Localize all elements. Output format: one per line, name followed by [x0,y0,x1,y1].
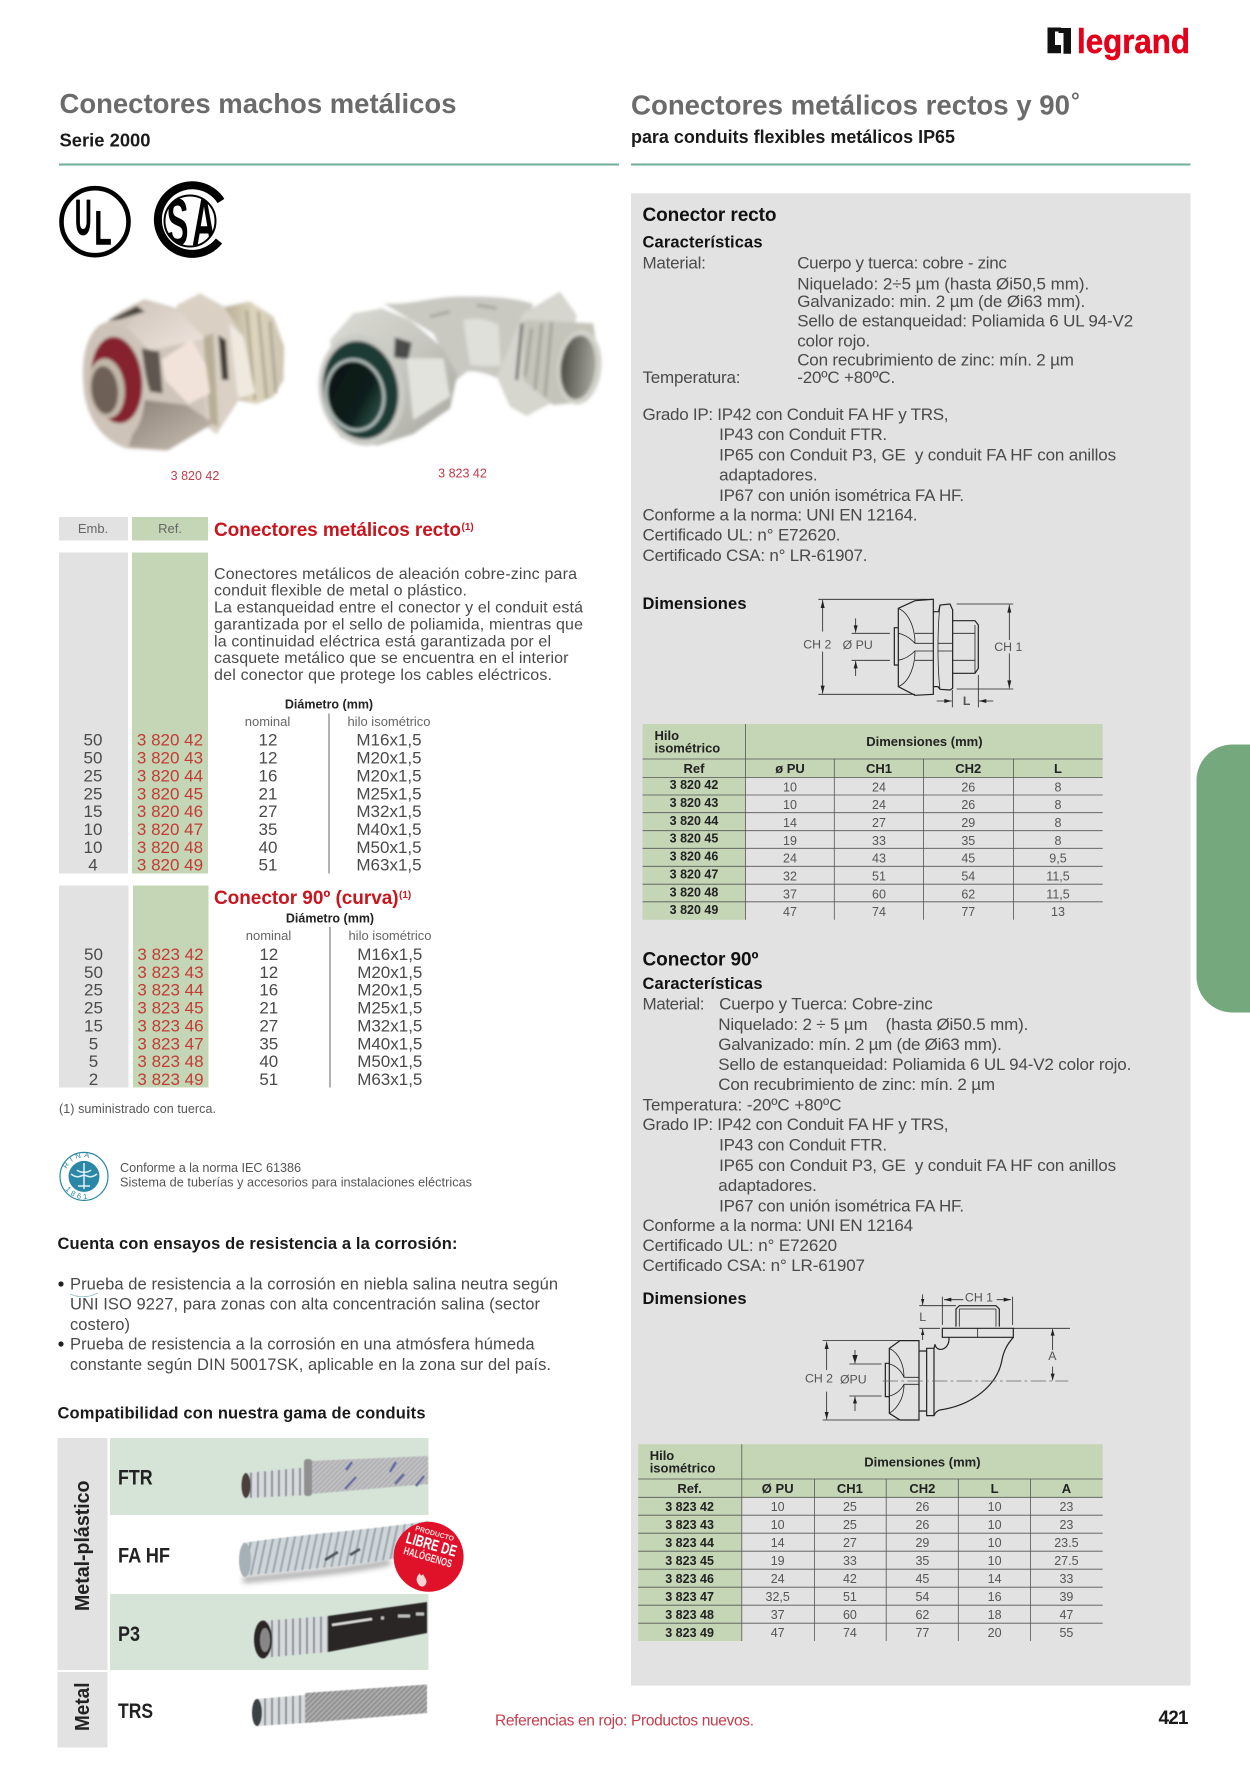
diagram: 90 degree connector dimensions: CH 1 [965,1291,993,1305]
table: 90 degree connector references: 3 823 43 [137,963,204,982]
text block: straight connector characteristics: Grado IP: IP42 con Conduit FA HF y TRS, [642,405,948,424]
text block: straight connector characteristics: Temperatura: [642,368,740,387]
table: 90 degree connector dimensions: 77 [915,1626,929,1640]
table: straight connector dimensions: 8 [1055,780,1062,794]
diagram: 90 degree connector dimensions: L [919,1310,926,1324]
table: 90 degree connector references: 3 823 44 [137,981,204,1000]
icon: RINA seal: RINA [63,1153,89,1168]
table: straight connector dimensions: 60 [872,887,886,901]
table: straight connector references: 3 820 48 [137,838,203,857]
table: 90 degree connector references [59,886,432,1089]
label: photo references: 3 823 42 [438,466,487,480]
table: straight connector dimensions: 24 [872,798,886,812]
text block: straight connector characteristics: Galvanizado: min. 2 µm (de Øi63 mm). [797,292,1085,311]
table: straight connector references: 50 [84,748,102,768]
text block: 90 degree connector characteristics: IP65 con Conduit P3, GE y conduit FA HF con anillos [719,1156,1116,1175]
diagram: straight connector dimensions: CH 1 [994,640,1022,654]
side tab [1196,744,1250,1012]
text block: 90 degree connector characteristics: Material: [642,995,704,1014]
table: straight connector references: 3 820 42 [137,731,203,750]
table: 90 degree connector dimensions: 3 823 42 [665,1500,714,1514]
table: 90 degree connector dimensions: 32,5 [766,1590,790,1604]
table: 90 degree connector dimensions: 45 [915,1572,929,1586]
text block: straight connector characteristics: color rojo. [797,332,870,351]
table: straight connector references: 3 820 46 [137,802,203,821]
table: 90 degree connector dimensions: CH1 [837,1481,863,1496]
diagram: 90 degree connector dimensions [805,1291,1070,1420]
table: straight connector references: 12 [259,748,277,768]
table: straight connector references: 4 [88,856,98,875]
table: 90 degree connector references: M63x1,5 [357,1070,422,1089]
table header: Emb. and Ref. [59,517,208,540]
table: straight connector references: 15 [84,802,102,821]
table: straight connector references: 25 [84,766,102,785]
table: 90 degree connector references: 2 [89,1070,98,1089]
heading: Conector 90: Conector 90º [642,950,759,970]
table: straight connector dimensions: 19 [783,834,797,848]
table: straight connector dimensions: 51 [872,870,886,884]
text block: 90 degree connector characteristics: Cuerpo y Tuerca: Cobre-zinc [719,995,933,1014]
table: 90 degree connector dimensions: 47 [1059,1608,1073,1622]
table: straight connector references: 40 [259,838,277,857]
table: 90 degree connector dimensions: A [1062,1481,1072,1496]
table: 90 degree connector references: 3 823 42 [137,945,204,964]
diagram: straight connector dimensions: L [963,694,971,708]
table: straight connector dimensions: 10 [783,780,797,794]
table: 90 degree connector references: M20x1,5 [357,963,422,982]
heading: left title [60,88,456,150]
table: straight connector dimensions: 35 [961,834,975,848]
table: 90 degree connector dimensions: 18 [988,1608,1002,1622]
photo: 90 degree connector [310,292,605,453]
note: red references: Referencias en rojo: Productos nuevos. [495,1712,754,1730]
table: 90 degree connector references: 25 [84,981,103,1000]
text block: 90 degree connector characteristics [642,975,1131,1275]
table: straight connector dimensions: 27 [872,816,886,830]
table: straight connector dimensions: Hilo [654,728,679,743]
table: 90 degree connector dimensions: 10 [771,1500,785,1514]
text block: 90 degree connector characteristics: Certificado UL: n° E72620 [642,1236,837,1255]
table: 90 degree connector references: 27 [259,1016,278,1035]
panel: conduit compatibility table: FTR [118,1466,153,1489]
table: 90 degree connector references: 50 [84,945,103,964]
text block: IEC conformity: Sistema de tuberías y accesorios para instalaciones eléctricas [120,1176,472,1190]
heading: right title [631,88,1080,147]
table: 90 degree connector references: 21 [259,999,278,1018]
table: straight connector dimensions: 43 [872,852,886,866]
table: straight connector dimensions: 33 [872,834,886,848]
icon: RINA seal [59,1152,109,1201]
table: straight connector dimensions: CH1 [866,761,892,776]
table: straight connector dimensions: 11,5 [1046,887,1070,901]
table: straight connector references: Diámetro (mm) [285,698,373,712]
heading: conduit compatibility: Compatibilidad con nuestra gama de conduits [58,1404,426,1422]
table: straight connector references: 3 820 44 [137,766,203,785]
table: 90 degree connector references: 3 823 47 [137,1034,204,1053]
table: straight connector references: 51 [259,856,277,875]
text block: straight connector characteristics: adaptadores. [719,466,818,484]
table: 90 degree connector dimensions: 3 823 45 [665,1554,714,1568]
text block: 90 degree connector characteristics: Conforme a la norma: UNI EN 12164 [642,1216,913,1235]
heading: Dimensiones 90: Dimensiones [642,1290,746,1308]
text block: straight connector characteristics: Certificado CSA: n° LR-61907. [642,546,868,565]
table: straight connector references [59,552,431,875]
table: 90 degree connector dimensions: 25 [843,1518,857,1532]
table: 90 degree connector dimensions: 23 [1059,1500,1073,1514]
text block: straight connector characteristics: -20ºC +80ºC. [797,368,895,387]
image: P3 conduit [254,1602,427,1658]
table: straight connector references: 10 [84,820,102,839]
table: straight connector dimensions: 47 [783,905,797,919]
image: TRS conduit [252,1684,427,1726]
table: straight connector dimensions: 74 [872,905,886,919]
text block: straight connector characteristics: Material: [642,254,706,272]
table: 90 degree connector dimensions: 14 [988,1572,1002,1586]
table: 90 degree connector dimensions: Dimensiones (mm) [864,1454,981,1470]
table: 90 degree connector references: 3 823 48 [137,1052,204,1071]
table: straight connector references: hilo isométrico [347,714,431,729]
diagram: straight connector dimensions: Ø PU [843,638,873,652]
table: 90 degree connector references: 15 [84,1016,103,1035]
table: 90 degree connector dimensions: 42 [843,1572,857,1586]
image: FA HF conduit [239,1521,428,1580]
heading: Conectores metálicos recto: Conectores metálicos recto [214,520,461,541]
table: 90 degree connector dimensions: 29 [915,1536,929,1550]
text block: 90 degree connector characteristics: IP67 con unión isométrica FA HF. [719,1196,964,1215]
text block: IEC conformity [120,1161,472,1190]
table: 90 degree connector dimensions: 3 823 47 [665,1590,714,1604]
table: straight connector dimensions: isométrico [654,740,720,756]
text block: product description: garantizada por el sello de poliamida, mientras que [214,616,583,634]
table: 90 degree connector dimensions: 10 [988,1500,1002,1514]
diagram: 90 degree connector dimensions: A [1048,1349,1057,1363]
table: 90 degree connector dimensions: 23 [1059,1518,1073,1532]
diagram: 90 degree connector dimensions: ØPU [840,1372,867,1386]
table: straight connector references: 50 [84,731,102,750]
table: 90 degree connector references: hilo isométrico [348,928,432,943]
table: straight connector dimensions: 26 [961,780,975,794]
table: 90 degree connector dimensions: 60 [843,1608,857,1622]
table: 90 degree connector dimensions: Ø PU [762,1481,794,1496]
table: 90 degree connector dimensions [638,1444,1103,1641]
table: straight connector references: 3 820 43 [137,748,203,768]
table: 90 degree connector dimensions: 51 [843,1590,857,1604]
diagram: 90 degree connector dimensions: CH 2 [805,1371,833,1385]
table: straight connector dimensions: 3 820 48 [670,885,718,899]
table: straight connector dimensions: 45 [961,852,975,866]
text block: straight connector characteristics: IP67 con unión isométrica FA HF. [719,486,964,505]
table: straight connector references: M16x1,5 [356,731,422,750]
heading: left title: Conectores machos metálicos [60,88,456,119]
table: straight connector dimensions: 8 [1055,834,1062,848]
table: 90 degree connector references: 5 [89,1034,98,1053]
table: straight connector dimensions: 8 [1055,798,1062,812]
table: 90 degree connector dimensions: 10 [988,1554,1002,1568]
heading: Conectores metálicos recto: (1) [462,522,474,533]
photo: straight connector [77,293,284,451]
text block: straight connector characteristics [642,234,1133,565]
icon: UL certification mark: U [75,190,92,246]
badge: halogen free [394,1522,464,1592]
table: straight connector dimensions: 11,5 [1046,870,1070,884]
table: straight connector references: M40x1,5 [356,820,422,839]
table: 90 degree connector dimensions: L [991,1481,999,1496]
icon: UL certification mark [62,188,128,256]
table: 90 degree connector dimensions: 39 [1059,1590,1073,1604]
text block: 90 degree connector characteristics: Galvanizado: mín. 2 µm (de Øi63 mm). [718,1035,1002,1054]
text block: IEC conformity: Conforme a la norma IEC 61386 [120,1161,301,1175]
table: straight connector dimensions: 37 [783,887,797,901]
table: 90 degree connector references: 12 [259,963,278,982]
table: 90 degree connector dimensions: 33 [843,1554,857,1568]
table: 90 degree connector dimensions: 20 [988,1626,1002,1640]
table: 90 degree connector dimensions: 10 [988,1518,1002,1532]
table: straight connector dimensions: 3 820 45 [670,832,718,846]
table: 90 degree connector references: 51 [259,1070,278,1089]
table header: Emb. and Ref.: Ref. [158,521,182,536]
table: 90 degree connector dimensions: 3 823 44 [665,1536,714,1550]
table: straight connector references: M20x1,5 [356,766,422,785]
heading: Conector recto: Conector recto [642,205,776,226]
table: straight connector dimensions [642,724,1103,920]
table: straight connector references: 16 [259,766,277,785]
table: straight connector dimensions: 3 820 46 [670,850,718,864]
table: 90 degree connector references: 5 [89,1052,98,1071]
table header: Emb. and Ref.: Emb. [78,521,108,536]
table: 90 degree connector dimensions: 55 [1059,1626,1073,1640]
table: 90 degree connector dimensions: 24 [771,1572,785,1586]
heading: right title: Conectores metálicos rectos y 90 [631,90,1070,120]
table: straight connector dimensions: 14 [783,816,797,830]
table: 90 degree connector dimensions: 14 [771,1536,785,1550]
text block: corrosion tests: Prueba de resistencia a la corrosión en una atmósfera húmeda [70,1336,535,1354]
text block: 90 degree connector characteristics: Niquelado: 2 ÷ 5 µm (hasta Øi50.5 mm). [718,1015,1028,1034]
table: 90 degree connector dimensions: 47 [771,1626,785,1640]
text block: product description: Conectores metálicos de aleación cobre-zinc para [214,566,577,583]
table: straight connector dimensions: 24 [783,852,797,866]
panel: product specifications [631,193,1190,1686]
table: straight connector dimensions: L [1054,761,1062,776]
panel: conduit compatibility table: TRS [118,1700,153,1723]
badge: halogen free: LIBRE DE [404,1530,459,1561]
panel: conduit compatibility table: FA HF [118,1544,170,1568]
text block: 90 degree connector characteristics: adaptadores. [718,1176,817,1195]
table: 90 degree connector references: 35 [259,1034,278,1053]
table: straight connector dimensions: 3 820 49 [670,903,718,917]
table: straight connector references: M20x1,5 [356,748,422,768]
badge: halogen free: HALÓGENOS [402,1544,454,1570]
table: 90 degree connector dimensions: 33 [1059,1572,1073,1586]
panel: conduit compatibility table: P3 [118,1623,140,1646]
table: straight connector references: 12 [259,731,277,750]
table: 90 degree connector dimensions: 74 [843,1626,857,1640]
footnote: (1) suministrado con tuerca. [59,1102,216,1116]
text block: product description: La estanqueidad entre el conector y el conduit está [214,600,583,616]
label: photo references [171,466,487,483]
heading: left title: Serie 2000 [60,130,150,150]
table: straight connector dimensions: 62 [961,887,975,901]
text block: straight connector characteristics: Características [642,234,762,252]
table: 90 degree connector references: M20x1,5 [357,981,422,1000]
heading: right title: para conduits flexibles metálicos IP65 [631,127,955,147]
table: 90 degree connector dimensions: 10 [988,1536,1002,1550]
table: 90 degree connector references: M32x1,5 [357,1016,422,1035]
image: FTR conduit [242,1456,428,1498]
table: 90 degree connector dimensions: CH2 [909,1481,935,1496]
icon: CSA certification mark: S [166,186,188,260]
table: straight connector dimensions: 24 [872,780,886,794]
heading: right title: ° [1071,88,1080,113]
icon: UL certification mark: L [94,202,112,256]
text block: straight connector characteristics: Sello de estanqueidad: Poliamida 6 UL 94-V2 [797,312,1133,331]
table: 90 degree connector references: (1) [399,890,411,901]
table: straight connector references: 35 [259,820,277,839]
table: 90 degree connector dimensions: 23.5 [1054,1536,1079,1550]
table: 90 degree connector dimensions: 10 [771,1518,785,1532]
heading: Dimensiones: Dimensiones [642,595,746,613]
text block: 90 degree connector characteristics: Certificado CSA: n° LR-61907 [642,1256,865,1275]
table: 90 degree connector dimensions: 27 [843,1536,857,1550]
text block: 90 degree connector characteristics: Sello de estanqueidad: Poliamida 6 UL 94-V2 color rojo. [718,1055,1131,1074]
text block: corrosion tests: Prueba de resistencia a la corrosión en niebla salina neutra según [70,1276,558,1294]
table: straight connector references: 10 [84,838,102,857]
table: 90 degree connector dimensions: 37 [771,1608,785,1622]
table: 90 degree connector references: M40x1,5 [357,1034,422,1053]
table: straight connector references: nominal [245,714,290,729]
text block: product description: conduit flexible de metal o plástico. [214,583,467,600]
table: straight connector dimensions: CH2 [955,761,981,776]
table: 90 degree connector dimensions: isométrico [650,1460,716,1476]
table: straight connector dimensions: 13 [1051,905,1065,919]
logo: legrand: legrand [1077,23,1190,61]
label: photo references: 3 820 42 [171,469,219,483]
table: 90 degree connector dimensions: 35 [915,1554,929,1568]
text block: straight connector characteristics: Certificado UL: n° E72620. [642,526,840,545]
table: straight connector dimensions: 3 820 43 [670,796,718,810]
diagram: straight connector dimensions: CH 2 [803,637,832,651]
icon: CSA certification mark: A [192,186,216,260]
text block: straight connector characteristics: IP65 con Conduit P3, GE y conduit FA HF con anillos [719,445,1116,464]
table: straight connector references: 3 820 47 [137,820,203,839]
table: straight connector references: 3 820 45 [137,784,203,803]
table: straight connector references: M63x1,5 [356,856,422,875]
table: 90 degree connector references: 12 [259,945,278,964]
text block: 90 degree connector characteristics: IP43 con Conduit FTR. [719,1136,887,1154]
table: 90 degree connector dimensions: 27.5 [1054,1554,1079,1568]
table: 90 degree connector references: 16 [259,981,278,1000]
table: straight connector references: 21 [259,784,277,803]
table: straight connector dimensions: Ref [684,761,705,776]
table: straight connector dimensions: 26 [961,798,975,812]
text block: 90 degree connector characteristics: Características [642,975,762,993]
text block: corrosion tests: constante según DIN 50017SK, aplicable en la zona sur del país. [70,1356,551,1374]
table: 90 degree connector dimensions: 25 [843,1500,857,1514]
text block: corrosion tests [58,1235,558,1374]
table: 90 degree connector dimensions: 3 823 49 [665,1626,714,1640]
table: 90 degree connector references: 3 823 46 [137,1016,204,1035]
table: straight connector references: M25x1,5 [356,784,422,803]
table: straight connector dimensions: 77 [961,905,975,919]
text block: corrosion tests: UNI ISO 9227, para zonas con alta concentración salina (sector [70,1295,540,1313]
table: 90 degree connector dimensions: 26 [915,1500,929,1514]
text block: product description [214,566,583,684]
diagram: straight connector dimensions [803,599,1022,708]
table: straight connector dimensions: 10 [783,798,797,812]
table: 90 degree connector references: Conector 90º (curva) [214,888,399,909]
page number: 421 [1158,1708,1189,1729]
text block: 90 degree connector characteristics: Grado IP: IP42 con Conduit FA HF y TRS, [642,1115,948,1134]
table: 90 degree connector references: 3 823 45 [137,999,204,1018]
text block: 90 degree connector characteristics: Con recubrimiento de zinc: mín. 2 µm [718,1075,995,1094]
table: 90 degree connector dimensions: 54 [915,1590,929,1604]
table: 90 degree connector references: 3 823 49 [137,1070,204,1089]
text block: 90 degree connector characteristics: Temperatura: -20ºC +80ºC [642,1095,842,1114]
icon: RINA seal: 1861 [66,1186,88,1200]
panel: conduit compatibility table: Metal-plástico [72,1480,94,1611]
table: straight connector references: M32x1,5 [356,802,422,821]
badge: halogen free: PRODUCTO [414,1525,455,1543]
table: 90 degree connector dimensions: 62 [915,1608,929,1622]
table: 90 degree connector dimensions: Hilo [650,1448,674,1463]
text block: straight connector characteristics: IP43 con Conduit FTR. [719,425,887,444]
table: 90 degree connector references: nominal [246,928,291,943]
table: straight connector references: 27 [259,802,277,821]
text block: corrosion tests: Cuenta con ensayos de resistencia a la corrosión: [58,1235,458,1253]
text block: straight connector characteristics: Conforme a la norma: UNI EN 12164. [642,506,918,525]
table: straight connector dimensions: 9,5 [1049,852,1067,866]
table: 90 degree connector references: 50 [84,963,103,982]
table: straight connector dimensions: 8 [1055,816,1062,830]
table: 90 degree connector references: 40 [259,1052,278,1071]
table: 90 degree connector dimensions: 26 [915,1518,929,1532]
panel: conduit compatibility table [58,1438,428,1748]
table: straight connector dimensions: 3 820 47 [670,867,718,881]
table: straight connector dimensions: ø PU [775,761,805,776]
table: straight connector references: 3 820 49 [137,856,203,875]
text block: product description: casquete metálico que se encuentra en el interior [214,650,569,667]
table: 90 degree connector references: Diámetro (mm) [286,912,374,926]
table: straight connector dimensions: 3 820 44 [670,814,718,828]
table: 90 degree connector references: M50x1,5 [357,1052,422,1071]
text block: straight connector characteristics: Cuerpo y tuerca: cobre - zinc [797,254,1007,272]
table: straight connector dimensions: 29 [961,816,975,830]
table: 90 degree connector references: M16x1,5 [357,945,422,964]
table: 90 degree connector dimensions: Ref. [677,1481,702,1496]
table: 90 degree connector dimensions: 3 823 48 [665,1608,714,1622]
table: 90 degree connector dimensions: 19 [771,1554,785,1568]
table: 90 degree connector references: M25x1,5 [357,999,422,1018]
table: straight connector dimensions: 54 [961,870,975,884]
panel: conduit compatibility table: Metal [72,1682,94,1731]
table: 90 degree connector dimensions: 3 823 46 [665,1572,714,1586]
text block: straight connector characteristics: Con recubrimiento de zinc: mín. 2 µm [797,351,1074,370]
text block: product description: la continuidad eléctrica está garantizada por el [214,633,551,650]
table: straight connector references: 25 [84,784,102,803]
table: straight connector dimensions: 32 [783,870,797,884]
text block: corrosion tests: costero) [70,1316,130,1334]
table: straight connector references: M50x1,5 [356,838,422,857]
text block: straight connector characteristics: Niquelado: 2÷5 µm (hasta Øi50,5 mm). [797,275,1089,294]
table: straight connector dimensions: Dimensiones (mm) [866,734,983,749]
table: 90 degree connector dimensions: 3 823 43 [665,1518,714,1532]
table: 90 degree connector references: 25 [84,999,103,1018]
table: 90 degree connector dimensions: 16 [988,1590,1002,1604]
table: straight connector dimensions: 3 820 42 [670,778,718,792]
text block: product description: del conector que protege los cables eléctricos. [214,667,552,684]
